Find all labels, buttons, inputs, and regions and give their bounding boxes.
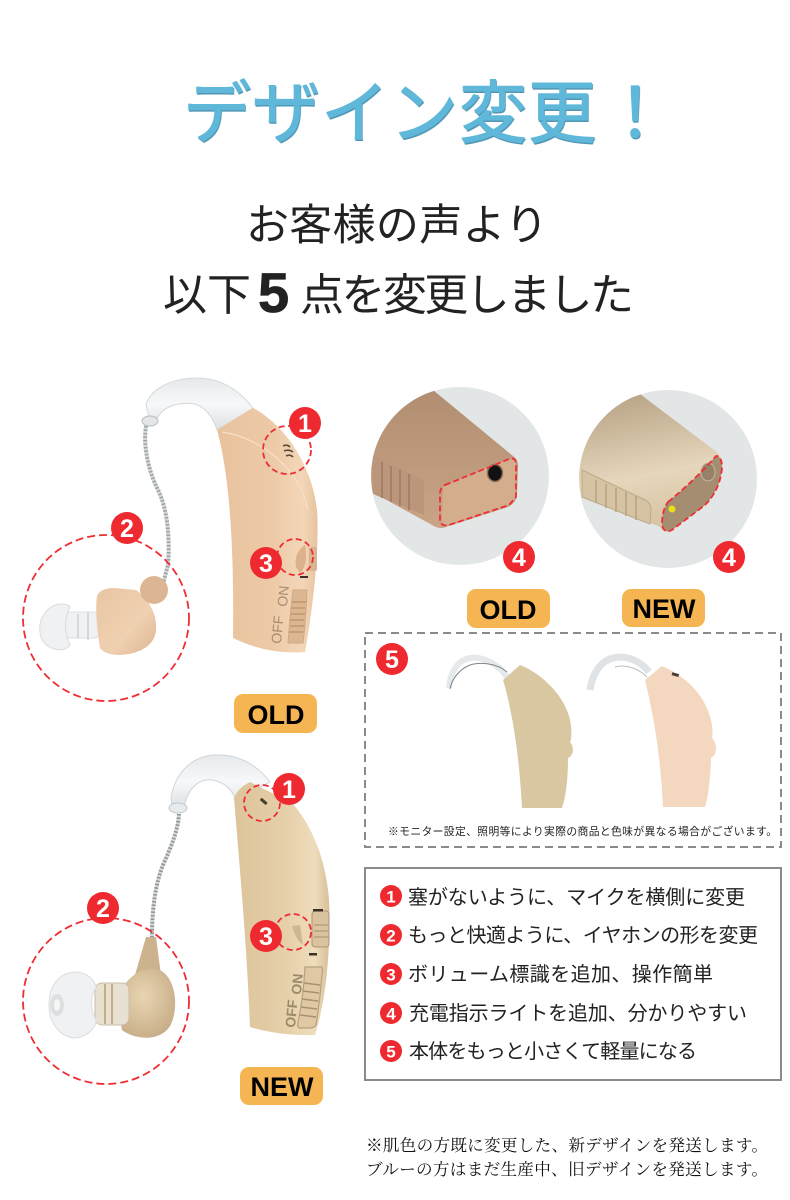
footnote [366,1136,768,1179]
badge 2: 2 [96,895,110,923]
badge 4: 4 [722,544,736,572]
badge 2: 2 [120,515,134,543]
badge 4: 4 [512,544,526,572]
panel: list of changes [365,868,781,1080]
old tag: OLD [480,595,536,625]
badge 1 [289,407,321,439]
new mic slot [260,798,268,805]
old ear hook tube [146,378,253,430]
old tube ring [142,416,158,426]
item 4: 4 [386,1004,396,1024]
badge 1 [273,773,305,805]
item 3: ボリューム標識を追加、操作簡単 [408,963,713,986]
body end [579,394,722,532]
subtitle: 5 [258,261,289,324]
left hook [449,658,507,689]
item 5: 5 [386,1042,396,1062]
new tag: NEW [250,1072,314,1102]
panel: new charging end closeup [570,380,757,627]
badge 5 [376,643,408,675]
new on off labels [282,973,306,1028]
callout circle 3 [277,539,313,575]
item 3: 3 [386,966,396,984]
new tube ring [169,803,187,813]
item 5: 本体をもっと小さくて軽量になる [409,1040,697,1063]
old volume wheel [296,545,317,578]
panel: old hearing aid [23,378,321,733]
item 1: 1 [386,888,396,906]
panel: new hearing aid [23,755,329,1105]
subtitle: 点を変更しました [300,271,634,320]
grey circle [371,387,549,565]
old power switch [288,590,307,643]
subtitle: 以下 [163,271,251,320]
new tag [622,589,705,627]
new ear stem [95,983,129,1025]
old ear tip [40,604,70,650]
old on off labels: ON [274,585,292,607]
badge 2 [111,512,143,544]
new power switch [298,967,322,1028]
old earbud [96,588,156,655]
subtitle: お客様の声より [246,202,548,250]
new on off labels: OFF [282,999,300,1028]
dashed outline [662,456,722,531]
item 2: もっと快適ように、イヤホンの形を変更 [408,924,758,947]
old ball joint [140,576,168,604]
item 1: 塞がないように、マイクを横側に変更 [408,886,745,909]
new ear hook tube [171,755,270,808]
end face [442,459,516,524]
badge 3 [250,920,282,952]
jack hole [488,464,502,482]
title: デザイン変更！ [183,76,670,152]
dashed frame [365,633,781,847]
old wire [145,426,169,584]
badge 2 [87,892,119,924]
badge 3 [250,547,282,579]
new earbud body [117,969,175,1038]
right hook [590,657,649,690]
dashed outline [440,459,516,525]
grip [373,456,424,515]
callout circle 3 [275,914,311,950]
old tag [467,589,550,628]
badge 4 [503,541,535,573]
panel: size comparison [365,633,781,847]
old tag: OLD [248,700,304,730]
left device [503,665,573,808]
port [701,463,715,481]
disclaimer: ※モニター設定、照明等により実際の商品と色味が異なる場合がございます。 [388,824,777,838]
new tag: NEW [632,594,696,624]
callout circle 2 [23,535,189,701]
new volume wheel [292,909,329,956]
old tag [234,694,317,733]
new wire [152,814,179,937]
subtitle [163,202,634,324]
new tag [240,1067,323,1105]
new ear tip [49,972,96,1038]
old on off labels: OFF [268,615,286,644]
panel: old charging end closeup [360,380,550,628]
badge 4 [713,541,745,573]
new earbud neck [135,937,161,975]
right device [645,666,716,807]
grey circle [579,390,757,568]
old mic holes [283,445,293,457]
footnote: ※肌色の方既に変更した、新デザインを発送します。 [366,1136,768,1155]
callout circle 1 [263,426,311,474]
old body [217,408,318,652]
badge 1: 1 [298,410,312,438]
mic slot [672,672,679,677]
new on off labels: ON [288,973,306,995]
badge 1: 1 [282,776,296,804]
old on off labels [268,585,292,644]
old body facet [222,432,308,510]
grip [582,470,651,524]
old ear stem [62,612,100,640]
indicator light [668,506,676,512]
badge 3: 3 [259,923,273,951]
end face [662,456,722,531]
body end [371,391,518,528]
badge 3: 3 [259,550,273,578]
badge 5: 5 [385,646,399,674]
callout circle 2 [23,918,189,1084]
item 2: 2 [386,926,396,946]
frame [365,868,781,1080]
footnote: ブルーの方はまだ生産中、旧デザインを発送します。 [366,1160,768,1179]
item 4: 充電指示ライトを追加、分かりやすい [409,1002,747,1025]
new body [234,782,329,1035]
callout circle 1 [244,785,280,821]
